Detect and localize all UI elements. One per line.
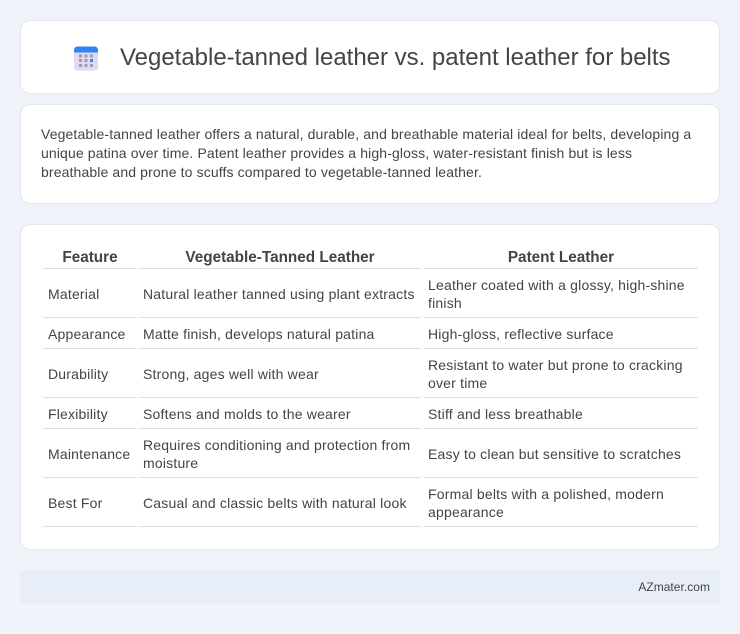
- summary text: unique patina over time. Patent leather provides a high-gloss, water-resistant finish but is less: [41, 145, 632, 161]
- row: best for: Formal belts with a polished, modern: [428, 486, 664, 502]
- table header: Feature: [62, 249, 118, 266]
- row: appearance: High-gloss, reflective surface: [428, 326, 614, 342]
- row: appearance: [48, 326, 614, 342]
- title: Vegetable-tanned leather vs. patent leather for belts: [120, 44, 671, 71]
- row: best for: appearance: [428, 504, 504, 520]
- row: maintenance: Requires conditioning and protection from: [143, 437, 410, 453]
- row: best for: Casual and classic belts with natural look: [143, 495, 407, 511]
- row: maintenance: Maintenance: [48, 446, 130, 462]
- comparison table panel: [20, 224, 720, 550]
- icon: calendar: [74, 46, 98, 70]
- header panel: [20, 20, 720, 94]
- table header: Vegetable-Tanned Leather: [185, 249, 375, 266]
- row: appearance: Appearance: [48, 326, 126, 342]
- row: durability: Strong, ages well with wear: [143, 366, 319, 382]
- row: durability: over time: [428, 375, 487, 391]
- row: material: Material: [48, 286, 99, 302]
- row: material: finish: [428, 295, 462, 311]
- row: material: Leather coated with a glossy, high-shine: [428, 277, 685, 293]
- table header: Patent Leather: [508, 249, 614, 266]
- row: maintenance: Easy to clean but sensitive to scratches: [428, 446, 681, 462]
- summary text: [41, 126, 692, 180]
- row: material: [48, 277, 685, 311]
- row: maintenance: [48, 437, 681, 471]
- row: best for: Best For: [48, 495, 103, 511]
- row: material: Natural leather tanned using plant extracts: [143, 286, 415, 302]
- row: durability: [48, 357, 683, 391]
- row: flexibility: Softens and molds to the wearer: [143, 406, 351, 422]
- row: flexibility: Flexibility: [48, 406, 108, 422]
- footer text: AZmater.com: [638, 580, 710, 594]
- row: maintenance: moisture: [143, 455, 198, 471]
- row: durability: Resistant to water but prone to cracking: [428, 357, 683, 373]
- footer bar: [20, 570, 720, 604]
- table header: [62, 249, 614, 266]
- summary text: breathable and prone to scuffs compared to vegetable-tanned leather.: [41, 164, 482, 180]
- row: flexibility: [48, 406, 583, 422]
- row: flexibility: Stiff and less breathable: [428, 406, 583, 422]
- row: durability: Durability: [48, 366, 108, 382]
- summary panel: [20, 104, 720, 204]
- row: appearance: Matte finish, develops natural patina: [143, 326, 375, 342]
- summary text: Vegetable-tanned leather offers a natural, durable, and breathable material ideal for belts, developing a: [41, 126, 691, 142]
- row: best for: [48, 486, 664, 520]
